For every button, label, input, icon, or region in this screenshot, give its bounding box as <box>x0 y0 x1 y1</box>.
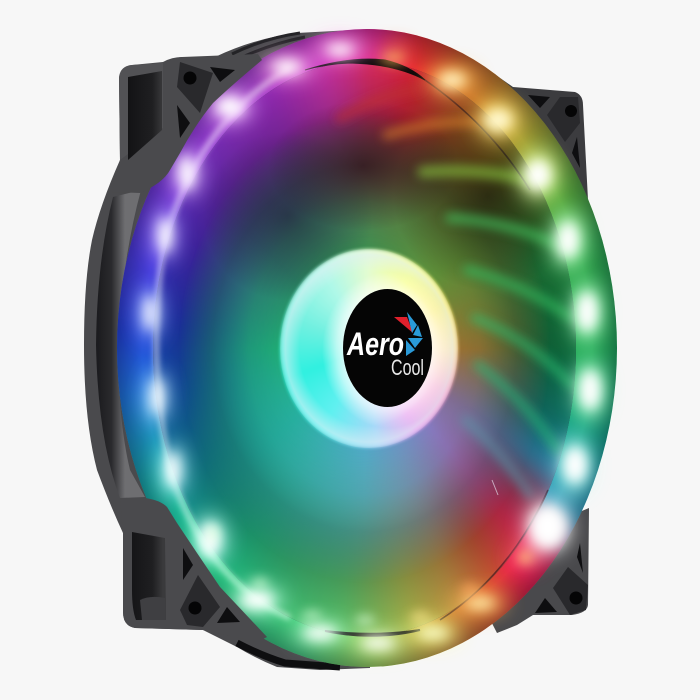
disc rim line <box>425 80 548 620</box>
frame: top-right corner <box>493 73 588 200</box>
frame: bottom-right corner <box>480 508 589 633</box>
LED halos <box>140 38 604 652</box>
bottom-left bracket <box>120 498 267 642</box>
top crescent shadow <box>305 59 425 80</box>
bottom crescent shadow <box>325 630 420 636</box>
logo: Cool text: Cool <box>391 355 424 380</box>
frame: body <box>84 29 370 670</box>
disc: colours near the hub <box>185 124 546 576</box>
top-right bracket details <box>528 95 580 168</box>
frame: left brackets over the ring <box>112 54 588 642</box>
logo badge <box>343 289 432 407</box>
ring inner highlight <box>156 68 290 618</box>
light ring <box>117 29 617 667</box>
ring: outer shading <box>117 29 617 667</box>
disc: edge colours <box>123 31 606 666</box>
disc: upper centre shadow <box>268 101 458 231</box>
logo: Aero text: Aero <box>346 326 404 362</box>
logo: red blade <box>394 317 413 333</box>
hub pale rim <box>280 249 458 448</box>
LED reflections on disc <box>207 525 479 626</box>
hub glow <box>280 249 458 448</box>
small blade mark <box>492 480 498 495</box>
bottom-right bracket details <box>535 543 588 615</box>
disc: mid shading <box>93 21 636 676</box>
disc: upper left shadow <box>203 131 373 301</box>
frame: top ridges <box>232 33 305 59</box>
top-left bracket <box>112 54 262 193</box>
hub inner light <box>322 272 454 428</box>
ring: colour wheel <box>87 0 647 697</box>
disc: upper right shadow <box>393 101 583 291</box>
logo: blue blades <box>406 312 423 356</box>
frame: side grip <box>96 190 145 498</box>
frame: bottom groove <box>237 643 340 667</box>
blade light streaks <box>340 88 572 495</box>
fan disc <box>153 61 576 636</box>
LED lights <box>145 45 600 648</box>
